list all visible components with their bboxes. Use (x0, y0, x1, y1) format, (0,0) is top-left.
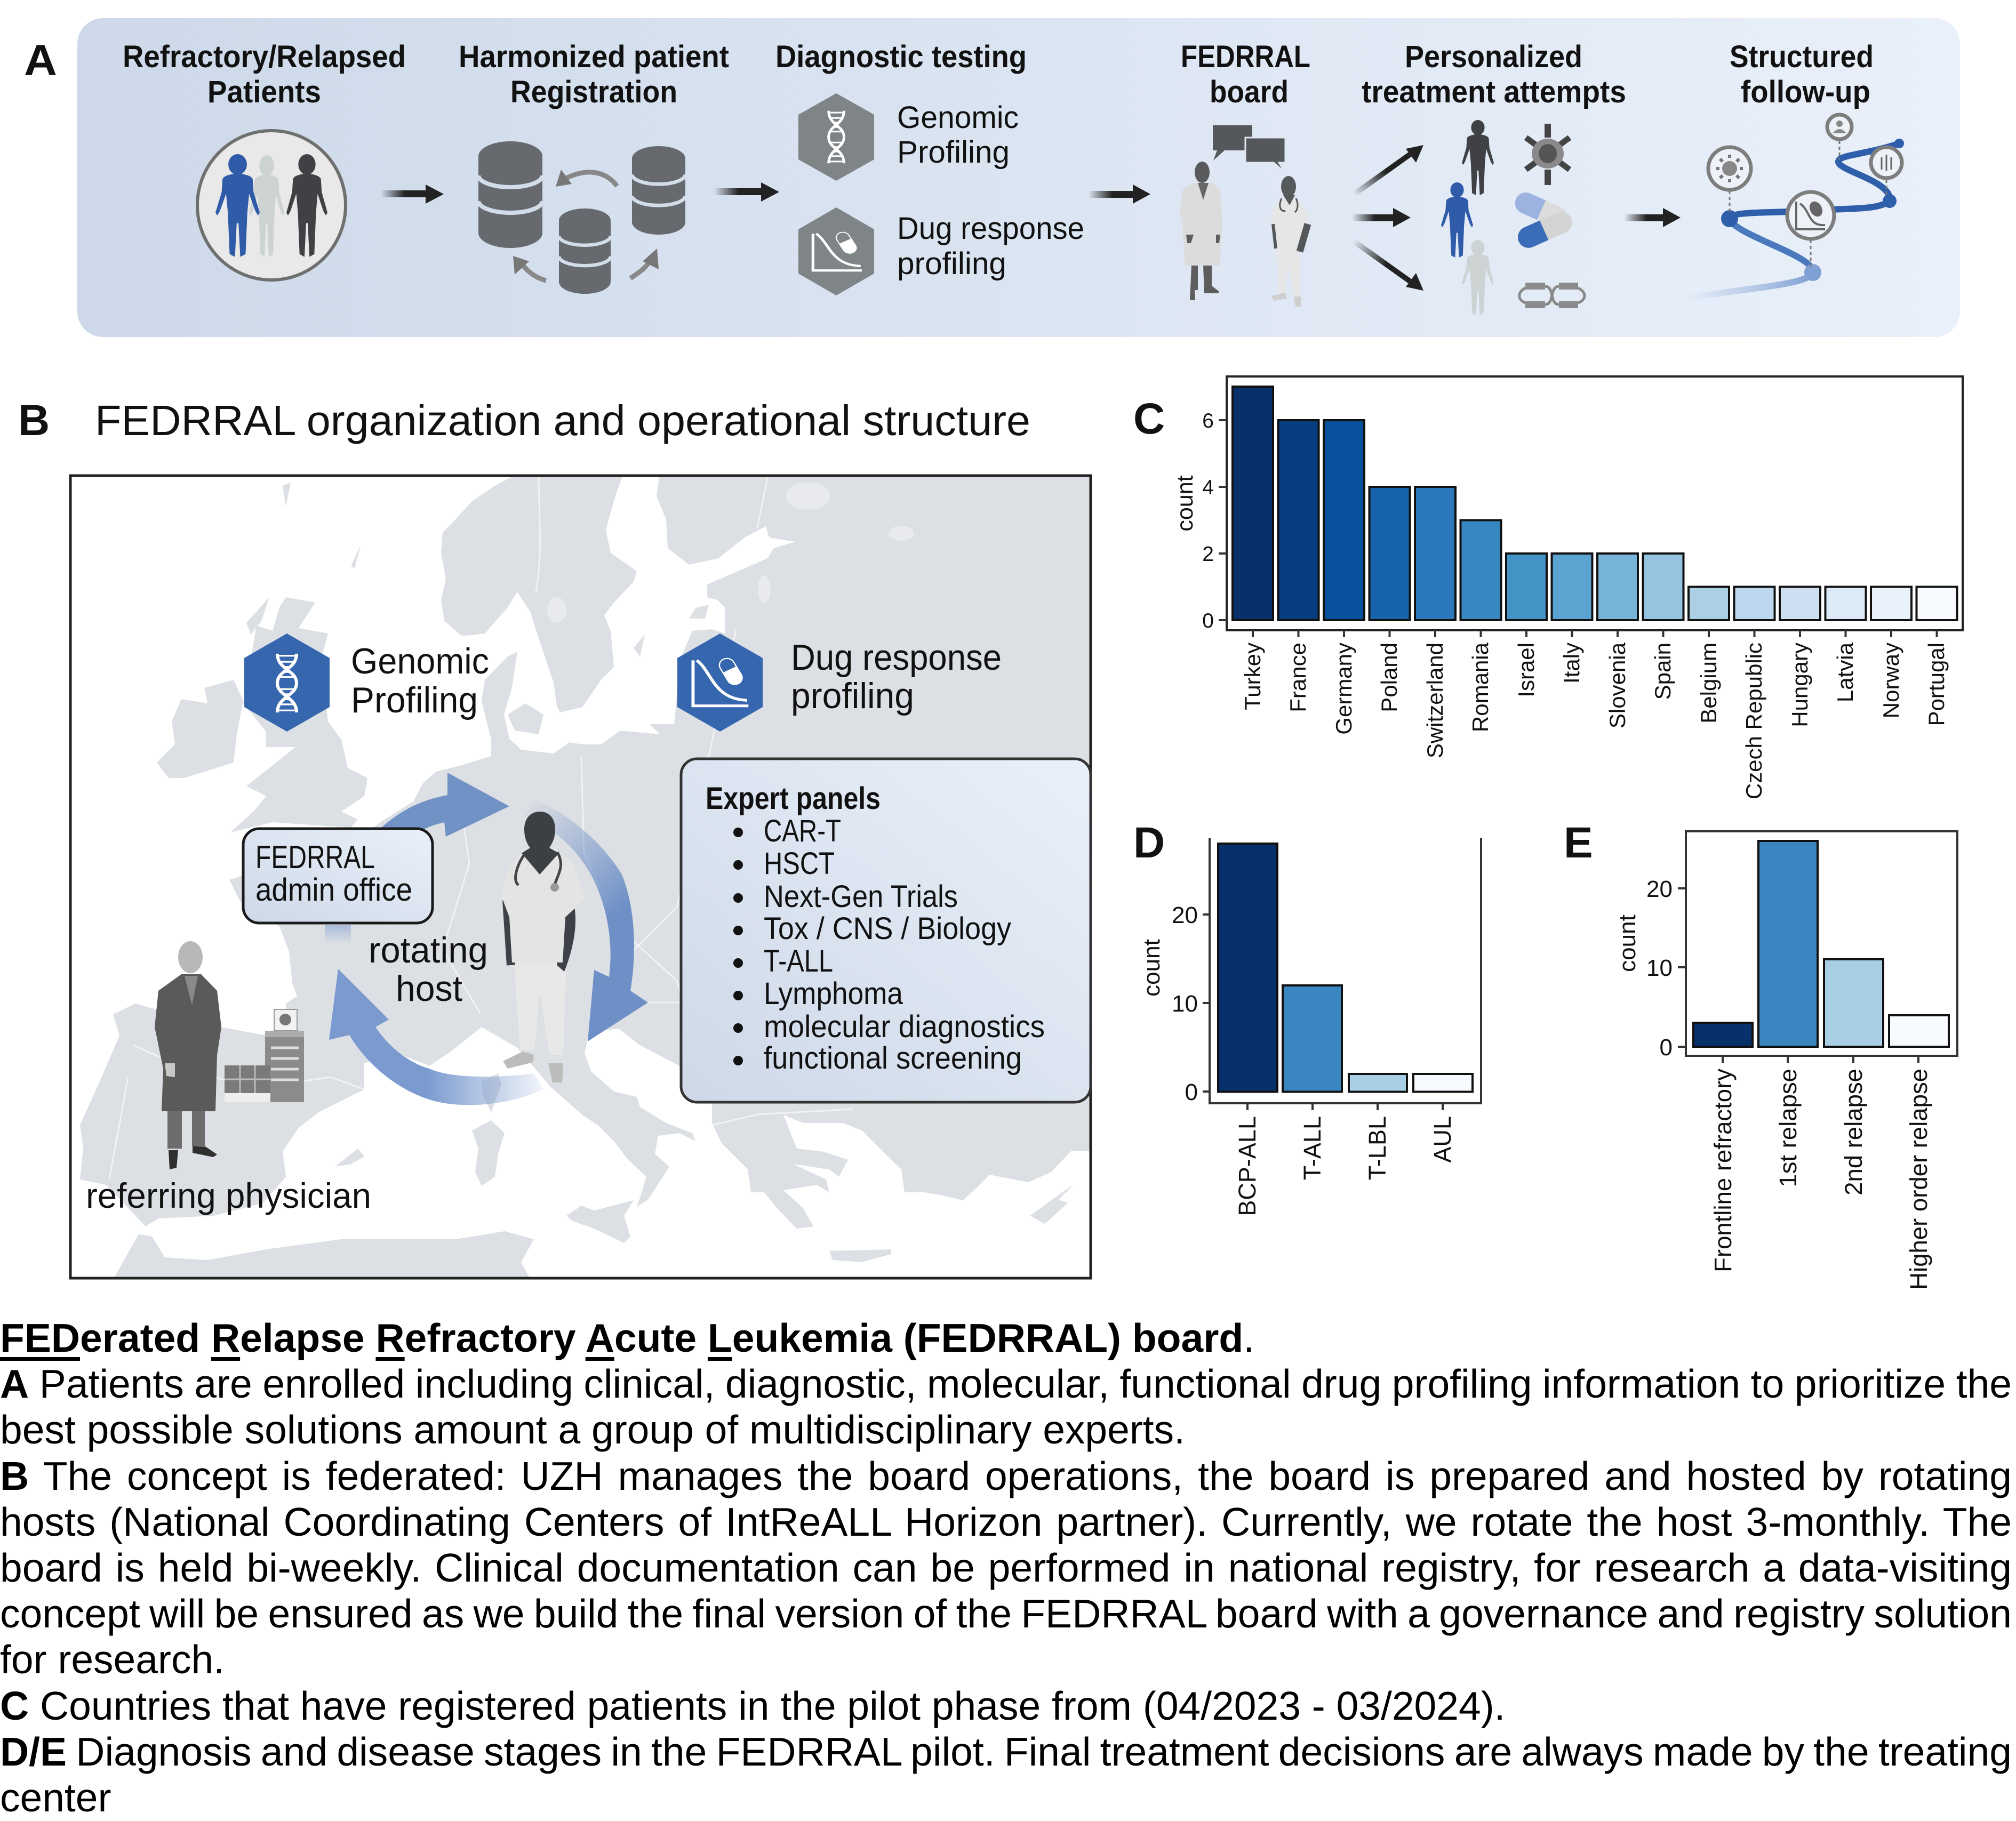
icon: genomic hexagon blue (244, 633, 330, 732)
x axis labels: AUL (1429, 1116, 1456, 1163)
label: drug response profiling: Dug response (897, 211, 1084, 246)
x axis labels: Turkey (1240, 643, 1265, 710)
y axis (1172, 410, 1227, 632)
arrow (381, 184, 444, 204)
heading: personalized treatment attempts: Personalized (1405, 39, 1582, 74)
label: genomic profiling: Profiling (897, 135, 1010, 170)
y axis: 0 (1660, 1034, 1673, 1061)
x axis labels: Germany (1331, 643, 1356, 735)
figure caption text: concept will be ensured as we build the final version of the FEDRRAL board with a governance and registry solution (0, 1591, 2012, 1636)
y axis: count (1139, 939, 1165, 997)
heading: harmonized patient registration (459, 39, 729, 109)
callout: FEDRRAL admin office: FEDRRAL (255, 839, 375, 875)
figure caption text: D/E Diagnosis and disease stages in the FEDRRAL pilot. Final treatment decisions are always made by the treating (0, 1729, 2012, 1774)
x axis labels: Italy (1559, 643, 1584, 684)
figure caption text: C Countries that have registered patients in the pilot phase from (04/2023 - 03/2024). (0, 1683, 1506, 1728)
panel: expert panels: molecular diagnostics (764, 1009, 1045, 1044)
x axis labels: BCP-ALL (1234, 1116, 1261, 1216)
y axis: 20 (1172, 902, 1198, 928)
figure: referring physician and hospital (155, 941, 304, 1169)
x axis labels: Slovenia (1605, 642, 1630, 728)
panel letter D: D (1133, 819, 1165, 867)
chart frame (1686, 831, 1957, 1056)
icon: databases (478, 141, 685, 294)
y axis: 0 (1185, 1079, 1198, 1105)
icon: patients in circle (197, 131, 346, 280)
heading: harmonized patient registration: Harmonized patient (459, 39, 729, 74)
x axis labels: 1st relapse (1774, 1069, 1802, 1188)
x axis labels: Frontline refractory (1709, 1069, 1737, 1272)
heading: personalized treatment attempts (1362, 39, 1626, 109)
heading: structured follow-up: follow-up (1741, 75, 1870, 109)
x axis labels: Portugal (1924, 643, 1949, 726)
label: genomic profiling: Profiling (351, 680, 478, 720)
panel: expert panels: Expert panels (706, 781, 881, 816)
map of Europe (80, 472, 1099, 1280)
heading: structured follow-up (1730, 39, 1874, 109)
panel: expert panels: CAR-T (764, 814, 841, 848)
x axis labels (1234, 1103, 1456, 1216)
panel letter E: E (1564, 819, 1593, 867)
y axis: 10 (1646, 955, 1673, 981)
map frame (70, 476, 1091, 1278)
heading: FEDRRAL board: FEDRRAL (1181, 39, 1310, 74)
heading: harmonized patient registration: Registration (510, 75, 677, 109)
y axis (1139, 902, 1210, 1105)
x axis labels: Poland (1377, 643, 1402, 712)
heading: refractory relapsed patients (123, 39, 406, 109)
label: drug response profiling: profiling (897, 246, 1006, 281)
y axis: 0 (1202, 609, 1214, 632)
y axis (1614, 876, 1686, 1061)
label: genomic profiling: Genomic (897, 100, 1019, 135)
icon: follow-up journey (1685, 115, 1904, 299)
arrow (1089, 184, 1150, 204)
y axis: count (1614, 914, 1641, 972)
heading: refractory relapsed patients: Patients (207, 75, 321, 109)
callout: FEDRRAL admin office: admin office (255, 872, 412, 908)
x axis labels: Higher order relapse (1905, 1069, 1932, 1290)
heading: FEDRRAL board: board (1210, 75, 1289, 109)
callout: FEDRRAL admin office (243, 829, 433, 923)
figure caption text: center (0, 1775, 111, 1820)
y axis: 6 (1202, 410, 1214, 432)
figure caption text: hosts (National Coordinating Centers of IntReALL Horizon partner). Currently, we rotate the host 3-monthly. The (0, 1499, 2012, 1544)
panel: expert panels (681, 759, 1091, 1102)
x axis labels: Israel (1514, 643, 1539, 697)
icon: drug response hexagon (798, 207, 874, 295)
heading: organization and operational structure: FEDRRAL organization and operational structure (95, 397, 1030, 444)
figure caption text: B The concept is federated: UZH manages the board operations, the board is prepared and hosted by rotating (0, 1454, 2012, 1498)
x axis labels: Latvia (1833, 642, 1858, 702)
x axis labels: T-LBL (1364, 1116, 1391, 1180)
panel letter C: C (1133, 395, 1165, 443)
panel: expert panels: Lymphoma (764, 976, 903, 1011)
x axis labels (1709, 1056, 1932, 1290)
x axis labels: T-ALL (1299, 1116, 1326, 1180)
figure caption text: A Patients are enrolled including clinical, diagnostic, molecular, functional drug profiling information to prioritize the (0, 1361, 2012, 1406)
x axis labels: Belgium (1696, 643, 1721, 724)
x axis labels: France (1285, 643, 1310, 712)
figure: rotating host doctor (501, 812, 586, 1082)
bars (1218, 844, 1473, 1092)
figure caption text: FEDerated Relapse Refractory Acute Leukemia (FEDRRAL) board. (0, 1315, 1254, 1360)
panel letter B: B (18, 396, 50, 445)
arrow (1624, 208, 1681, 227)
x axis labels: Czech Republic (1741, 643, 1766, 799)
arrow: rotating host upper (380, 773, 509, 837)
panel E: bar chart of disease stages (1564, 819, 1957, 1290)
panel: expert panels: Tox / CNS / Biology (764, 911, 1011, 946)
label: drug response profiling (897, 211, 1084, 281)
figure caption text: board is held bi-weekly. Clinical documentation can be performed in national registry, for research a data-visiting (0, 1545, 2012, 1590)
x axis labels: 2nd relapse (1840, 1069, 1867, 1196)
figure caption text: for research. (0, 1637, 225, 1682)
figure caption text (0, 1315, 2012, 1820)
arrow (714, 182, 779, 202)
label: genomic profiling: Genomic (351, 641, 489, 681)
label: rotating host: host (396, 968, 462, 1009)
panel letter A: A (24, 36, 57, 85)
label: rotating host (369, 930, 488, 1009)
panel A background (77, 18, 1960, 337)
x axis labels (1240, 630, 1949, 799)
y axis: 4 (1202, 476, 1214, 499)
x axis labels: Norway (1878, 643, 1903, 718)
heading: structured follow-up: Structured (1730, 39, 1874, 74)
x axis labels: Romania (1468, 642, 1493, 732)
arrow: rotating host lower (329, 969, 543, 1105)
figure caption text: best possible solutions amount a group of multidisciplinary experts. (0, 1407, 1185, 1452)
label: genomic profiling (897, 100, 1019, 170)
arrow: rotating host right (525, 800, 648, 1041)
heading: diagnostic testing: Diagnostic testing (775, 39, 1027, 74)
icon: genomic hexagon (798, 93, 874, 181)
panel: expert panels: functional screening (764, 1041, 1022, 1076)
label: genomic profiling (351, 641, 489, 720)
panel A: patient workflow (24, 18, 1960, 337)
panel: expert panels: Next-Gen Trials (764, 879, 958, 914)
icon: treatment patients (1441, 120, 1494, 315)
heading: personalized treatment attempts: treatment attempts (1362, 75, 1626, 109)
arrows to treatment attempts (1352, 145, 1423, 291)
arrow tail fading below admin office (325, 925, 351, 943)
x axis labels: Switzerland (1422, 643, 1447, 758)
label: drug response profiling (791, 637, 1002, 716)
icon: treatment options (1511, 124, 1585, 308)
bars (1233, 387, 1957, 620)
heading: FEDRRAL board (1181, 39, 1310, 109)
x axis labels: Spain (1650, 643, 1675, 700)
y axis: 10 (1172, 991, 1198, 1017)
panel D: bar chart of diagnosis (1133, 819, 1481, 1216)
label: rotating host: rotating (369, 930, 488, 970)
panel: expert panels: HSCT (764, 846, 835, 881)
label: referring physician: referring physician (86, 1176, 371, 1215)
label: drug response profiling: Dug response (791, 637, 1002, 678)
panel B: organization and operational structure (18, 396, 1099, 1280)
icon: board discussion with two doctors (1180, 125, 1309, 307)
chart axes (1210, 838, 1481, 1103)
panel C: bar chart of countries (1133, 376, 1963, 799)
heading: refractory relapsed patients: Refractory/Relapsed (123, 39, 406, 74)
icon: drug response hexagon blue (677, 633, 763, 732)
bars (1693, 841, 1949, 1047)
chart frame (1227, 376, 1963, 630)
y axis: 20 (1646, 876, 1673, 902)
y axis: count (1172, 475, 1198, 532)
y axis: 2 (1202, 543, 1214, 566)
label: drug response profiling: profiling (791, 676, 914, 716)
x axis labels: Hungary (1787, 643, 1812, 727)
panel: expert panels: T-ALL (764, 944, 833, 978)
